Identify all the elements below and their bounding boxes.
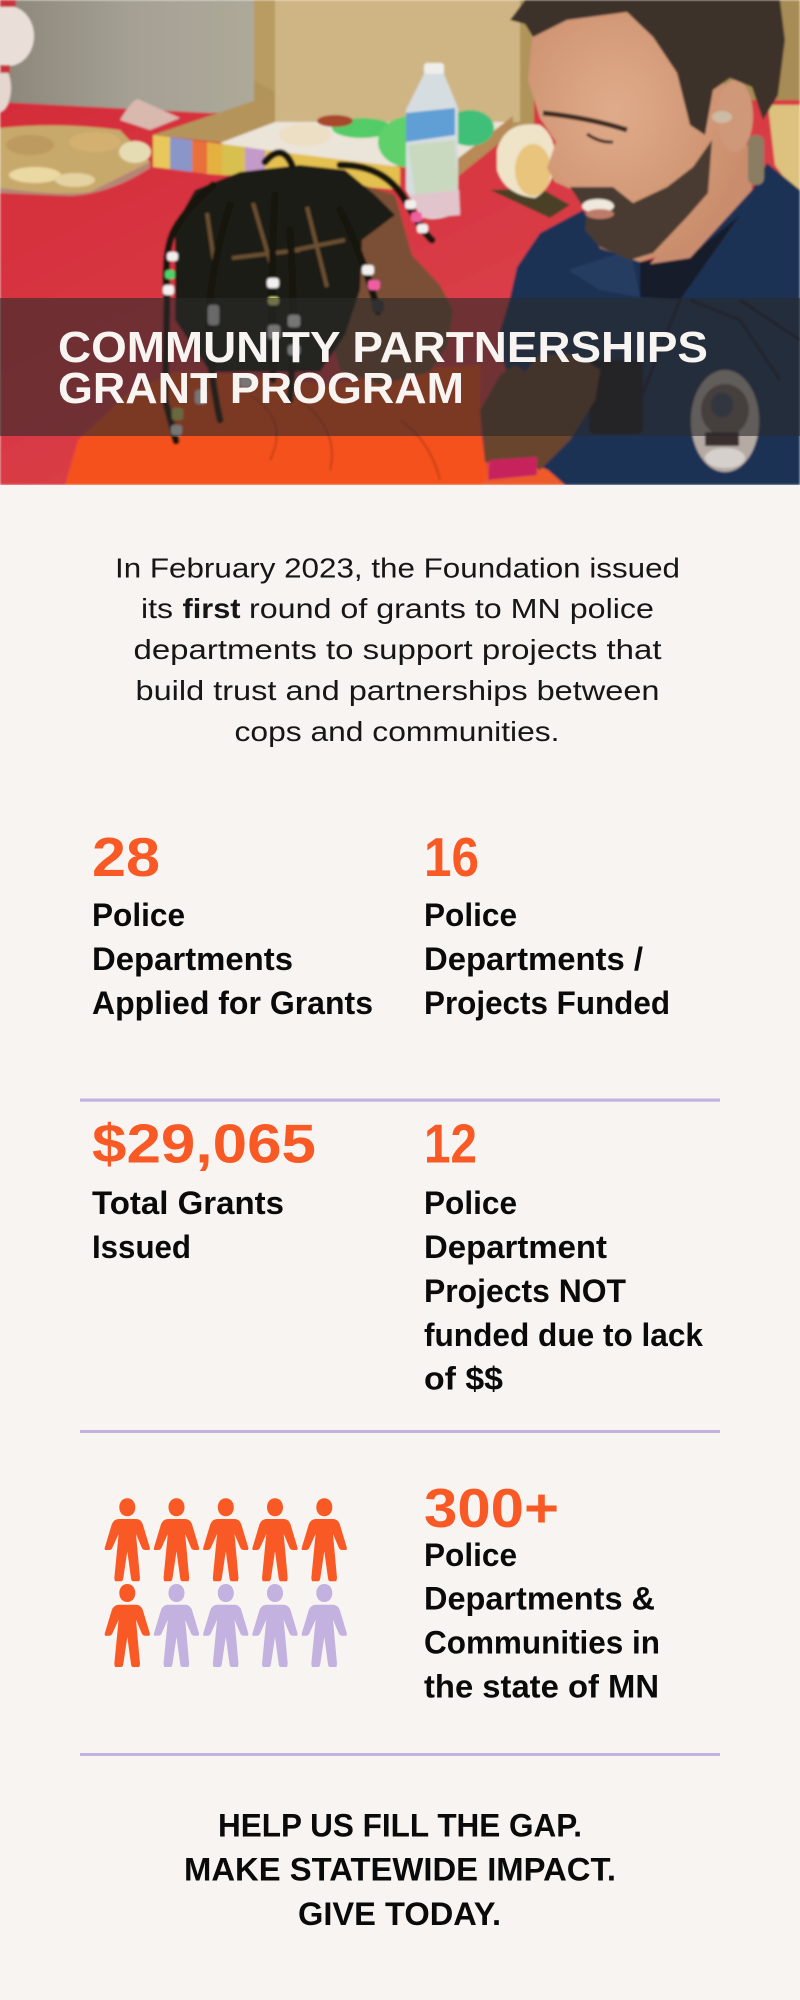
divider: [80, 1430, 720, 1433]
stat: total grants issued: [92, 1112, 316, 1265]
stat: total grants issued: Issued: [92, 1229, 191, 1265]
call to action: GIVE TODAY.: [298, 1896, 501, 1932]
intro paragraph: build trust and partnerships between: [136, 675, 660, 706]
stat: 12 projects not funded: of $$: [424, 1360, 503, 1396]
wall: [0, 0, 260, 113]
stat: 12 projects not funded: Police: [424, 1185, 517, 1221]
stat: 28 departments applied: Applied for Grants: [92, 985, 373, 1021]
face: [334, 184, 454, 386]
pink cuff: [488, 457, 537, 480]
cookies plate: [0, 99, 180, 196]
stat: total grants issued: $29,065: [92, 1112, 316, 1174]
stat: 12 projects not funded: Department: [424, 1229, 607, 1265]
stat: 300+ departments and communities: Departments &: [424, 1580, 655, 1616]
stat: 12 projects not funded: [424, 1112, 703, 1396]
badge: [691, 370, 759, 472]
mouth: [582, 199, 614, 219]
table and red cloth: [0, 100, 800, 485]
officer: [497, 0, 800, 485]
stat: 300+ departments and communities: Communities in: [424, 1624, 660, 1660]
pizza box interior: [153, 0, 534, 178]
beard: [570, 140, 712, 260]
intro paragraph: departments to support projects that: [134, 634, 662, 665]
beads: [163, 200, 428, 435]
stat: 12 projects not funded: funded due to lack: [424, 1317, 703, 1353]
stat: 16 projects funded: Departments /: [424, 941, 643, 977]
stat: 28 departments applied: Police: [92, 897, 185, 933]
hair: [175, 165, 395, 372]
backdrop behind officer: [722, 0, 800, 102]
stat: 16 projects funded: Police: [424, 897, 517, 933]
toy: [0, 0, 34, 112]
ear: [725, 78, 754, 151]
call to action: [184, 1808, 616, 1932]
hair: [510, 0, 785, 135]
title: GRANT PROGRAM: [58, 365, 464, 413]
hair partings: [207, 203, 345, 287]
uniform seams: [643, 300, 800, 392]
neck: [650, 140, 752, 264]
intro paragraph: cops and communities.: [234, 716, 560, 747]
intro paragraph: its: [141, 593, 173, 624]
radio: [589, 360, 643, 434]
earpiece: [712, 111, 764, 185]
hero photo: officer and child: [0, 0, 800, 485]
box coloured stripes: [153, 135, 400, 190]
stat: 28 departments applied: 28: [92, 826, 160, 888]
treats in the box: [279, 110, 494, 168]
stat: 16 projects funded: Projects Funded: [424, 985, 670, 1021]
orange coat: [65, 365, 490, 485]
water bottle: [406, 63, 460, 219]
intro paragraph: first: [182, 593, 240, 624]
icon: lavender figures: [154, 1584, 347, 1667]
stat: 16 projects funded: 16: [424, 826, 479, 888]
call to action: MAKE STATEWIDE IMPACT.: [184, 1852, 616, 1888]
stat: 300+ departments and communities: the state of MN: [424, 1668, 659, 1704]
call to action: HELP US FILL THE GAP.: [218, 1808, 582, 1844]
title: [58, 324, 708, 413]
divider: [80, 1098, 720, 1102]
divider: [80, 1753, 720, 1756]
dessert at right edge: [768, 105, 800, 200]
eyebrow and eye: [543, 113, 627, 142]
stat: 16 projects funded: [424, 826, 670, 1021]
stat: 300+ departments and communities: [424, 1477, 660, 1704]
coat pattern: [250, 395, 440, 480]
inner shirt: [640, 215, 740, 300]
uniform: [497, 163, 800, 485]
intro paragraph: [115, 552, 680, 747]
cake: [490, 124, 570, 218]
icon: orange figures: [105, 1498, 347, 1667]
intro paragraph: round of grants to MN police: [249, 593, 654, 624]
stat: 300+ departments and communities: 300+: [424, 1477, 559, 1539]
title band: [0, 298, 800, 436]
intro paragraph: In February 2023, the Foundation issued: [115, 552, 680, 584]
child: [65, 153, 600, 485]
stat: 28 departments applied: [92, 826, 373, 1021]
braids: [165, 153, 432, 441]
stat: 12 projects not funded: 12: [424, 1112, 477, 1174]
stat: 300+ departments and communities: Police: [424, 1537, 517, 1573]
title: COMMUNITY PARTNERSHIPS: [58, 324, 708, 372]
stat: 12 projects not funded: Projects NOT: [424, 1273, 626, 1309]
stat: 28 departments applied: Departments: [92, 941, 293, 977]
pictogram: 6 of 10 figures filled: [105, 1498, 347, 1667]
face: [528, 10, 745, 262]
stat: total grants issued: Total Grants: [92, 1185, 284, 1221]
hand: [480, 355, 600, 470]
collar: [570, 254, 639, 296]
